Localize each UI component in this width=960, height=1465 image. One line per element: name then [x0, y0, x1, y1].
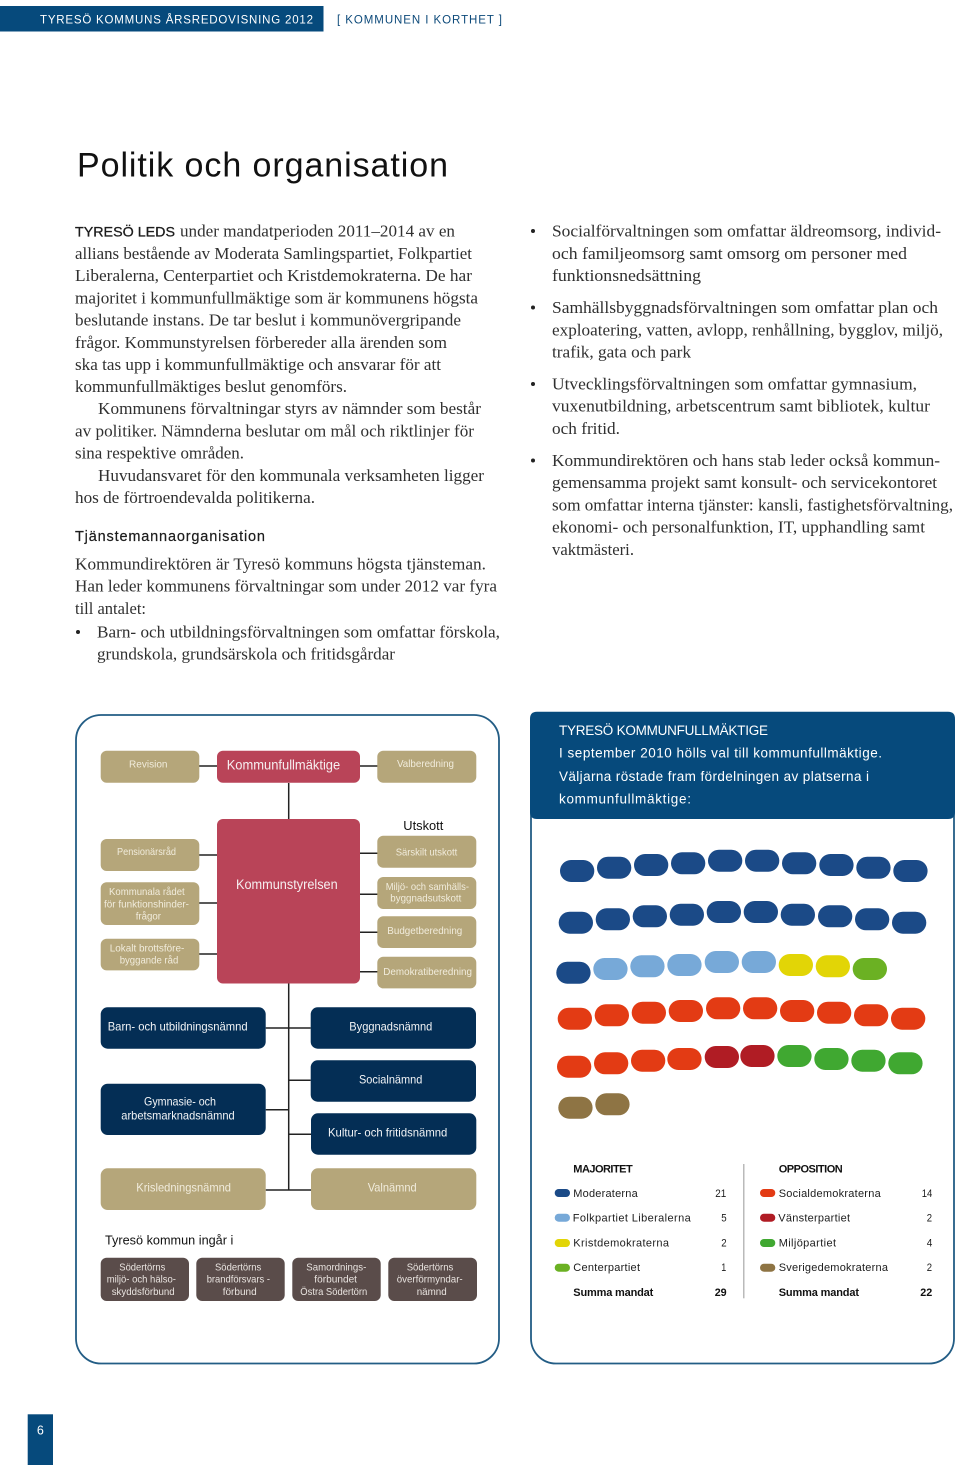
text block: organisation left column	[75, 554, 500, 664]
box: Demokratiberedning: Demokratiberedning	[383, 966, 472, 978]
box: Samordningsförbundet Östra Södertörn: förbundet	[314, 1274, 357, 1286]
title: Politik och organisation	[77, 146, 448, 184]
box: Södertörns brandförsvarsförbund: brandförsvars -	[207, 1274, 270, 1286]
box: Södertörns överförmyndarnämnd: nämnd	[417, 1286, 447, 1298]
legend: majoritet	[555, 1163, 727, 1299]
text block: right column bullet list: trafik, gata och park	[552, 342, 692, 362]
text block: intro left column: TYRESÖ LEDS	[75, 222, 175, 240]
legend: majoritet: 1	[721, 1262, 726, 1274]
box: Södertörns överförmyndarnämnd: överförmyndar-	[397, 1274, 463, 1286]
box: Kultur- och fritidsnämnd: Kultur- och fritidsnämnd	[328, 1126, 447, 1140]
text block: intro left column: majoritet i kommunfullmäktige som är kommunens högsta	[75, 288, 479, 308]
legend: majoritet: Moderaterna	[573, 1188, 639, 1200]
text block: intro left column: ska tas upp i kommunfullmäktige och ansvarar för att	[75, 355, 441, 374]
box: Samordningsförbundet Östra Södertörn: Samordnings-	[306, 1262, 367, 1274]
legend: majoritet: 29	[715, 1287, 727, 1299]
legend: opposition: Socialdemokraterna	[779, 1188, 882, 1200]
callout: Tyresö kommunfullmäktige header: I september 2010 hölls val till kommunfullmäktige.	[559, 746, 882, 760]
panel: election results	[530, 712, 955, 1364]
box: Gymnasie- och arbetsmarknadsnämnd: Gymnasie- och	[144, 1094, 216, 1108]
box: Södertörns brandförsvarsförbund	[196, 1258, 285, 1301]
seat row 3	[556, 951, 887, 984]
header band	[0, 6, 324, 32]
text block: intro left column: Kommunens förvaltningar styrs av nämnder som består	[98, 399, 482, 418]
legend: majoritet: Folkpartiet Liberalerna	[573, 1213, 692, 1225]
box: Byggnadsnämnd: Byggnadsnämnd	[349, 1020, 432, 1034]
heading: Tyresö kommun ingår i: Tyresö kommun ingår i	[105, 1232, 233, 1247]
box: Södertörns miljö- och hälsoskyddsförbund: skyddsförbund	[112, 1286, 175, 1298]
legend: opposition: 4	[927, 1238, 932, 1250]
box: Gymnasie- och arbetsmarknadsnämnd	[101, 1084, 266, 1135]
box: Kommunfullmäktige: Kommunfullmäktige	[227, 756, 340, 772]
text block: right column bullet list: Kommundirektören och hans stab leder också kommun-	[552, 451, 940, 470]
text block: intro left column: Huvudansvaret för den kommunala verksamheten ligger	[98, 466, 485, 485]
box: Södertörns överförmyndarnämnd: Södertörns	[407, 1262, 453, 1274]
box: Södertörns miljö- och hälsoskyddsförbund	[101, 1258, 189, 1301]
box: Pensionärsråd: Pensionärsråd	[117, 846, 176, 858]
box: Revision: Revision	[129, 758, 168, 770]
text block: intro left column: beslutande instans. De tar beslut i kommunövergripande	[75, 310, 461, 330]
text block: right column bullet list: ekonomi- och personalfunktion, IT, upphandling samt	[552, 518, 925, 536]
section label: [ KOMMUNEN I KORTHET ]	[337, 14, 502, 26]
text block: intro left column: allians bestående av Moderata Samlingspartiet, Folkpartiet	[75, 244, 472, 263]
text block: right column bullet list: gemensamma projekt samt konsult- och servicekontoret	[552, 473, 937, 492]
box: Socialnämnd: Socialnämnd	[359, 1072, 422, 1086]
header band: TYRESÖ KOMMUNS ÅRSREDOVISNING 2012	[40, 14, 313, 26]
text block: right column bullet list: exploatering, vatten, avlopp, renhållning, bygglov, miljö,	[552, 320, 943, 340]
legend: opposition: Summa mandat	[779, 1287, 859, 1299]
box: Södertörns överförmyndarnämnd	[388, 1258, 477, 1301]
box: Kommunala rådet	[101, 882, 199, 925]
box: Kommunstyrelsen: Kommunstyrelsen	[236, 877, 338, 892]
box: Samordningsförbundet Östra Södertörn	[292, 1258, 381, 1301]
callout: Tyresö kommunfullmäktige header: kommunfullmäktige:	[559, 792, 691, 807]
callout: Tyresö kommunfullmäktige header: Väljarna röstade fram fördelningen av platserna i	[559, 769, 869, 784]
legend: opposition: Sverigedemokraterna	[779, 1262, 889, 1274]
page number tab: 6	[37, 1424, 44, 1438]
box: Lokalt brottsförebyggande råd: byggande råd	[120, 954, 178, 966]
text block: organisation left column: Barn- och utbildningsförvaltningen som omfattar förskola,	[97, 622, 500, 642]
box: Kommunala rådet: Kommunala rådet	[109, 886, 185, 898]
text block: organisation left column: Han leder kommunens förvaltningar som under 2012 var fyra	[75, 576, 498, 596]
text block: organisation left column: grundskola, grundsärskola och fritidsgårdar	[97, 644, 396, 664]
box: Särskilt utskott: Särskilt utskott	[396, 846, 457, 858]
callout: Tyresö kommunfullmäktige header: TYRESÖ KOMMUNFULLMÄKTIGE	[559, 723, 768, 738]
text block: right column bullet list: vaktmästeri.	[552, 540, 634, 559]
legend: opposition: 14	[922, 1188, 932, 1200]
text block: right column bullet list: vuxenutbildning, arbetscentrum samt bibliotek, kultur	[552, 396, 931, 416]
box: Barn- och utbildningsnämnd: Barn- och utbildningsnämnd	[108, 1020, 248, 1034]
box: Miljö- och samhällsbyggnadsutskott: byggnadsutskott	[390, 893, 461, 905]
legend: majoritet: MAJORITET	[573, 1163, 633, 1175]
seat row 4	[558, 997, 925, 1030]
legend: opposition: 22	[920, 1287, 932, 1299]
text block: organisation left column: Kommundirektören är Tyresö kommuns högsta tjänsteman.	[75, 554, 486, 574]
legend: opposition: OPPOSITION	[779, 1163, 843, 1175]
text block: right column bullet list: och familjeomsorg samt omsorg om personer med	[552, 244, 908, 263]
callout: Tyresö kommunfullmäktige header	[530, 712, 955, 819]
legend: majoritet: Centerpartiet	[573, 1262, 640, 1274]
text block: right column bullet list: som omfattar interna tjänster: kansli, fastighetsförvaltning,	[552, 496, 953, 514]
box: Södertörns brandförsvarsförbund: förbund	[223, 1286, 257, 1298]
text block: right column bullet list: och fritid.	[552, 419, 620, 438]
box: Södertörns miljö- och hälsoskyddsförbund: miljö- och hälso-	[107, 1274, 176, 1286]
box: Revision	[101, 751, 199, 783]
box: Krisledningsnämnd	[101, 1168, 266, 1210]
box: Södertörns miljö- och hälsoskyddsförbund: Södertörns	[119, 1262, 165, 1274]
box: Kommunstyrelsen	[217, 819, 360, 984]
box: Miljö- och samhällsbyggnadsutskott: Miljö- och samhälls-	[386, 881, 469, 893]
text block: intro left column: sina respektive områden.	[75, 444, 244, 462]
seat row 6	[558, 1093, 630, 1119]
box: Miljö- och samhällsbyggnadsutskott	[377, 877, 476, 909]
legend: majoritet: 2	[721, 1238, 727, 1250]
page number tab	[28, 1414, 53, 1465]
text block: intro left column: frågor. Kommunstyrelsen förbereder alla ärenden som	[75, 333, 447, 352]
text block: right column bullet list: Utvecklingsförvaltningen som omfattar gymnasium,	[552, 374, 917, 394]
legend: opposition: 2	[927, 1262, 932, 1274]
text block: right column bullet list	[531, 222, 953, 559]
box: Socialnämnd	[311, 1060, 476, 1102]
box: Särskilt utskott	[377, 836, 476, 868]
box: Kultur- och fritidsnämnd	[311, 1113, 476, 1155]
text block: right column bullet list: funktionsnedsättning	[552, 266, 701, 285]
box: Barn- och utbildningsnämnd	[101, 1007, 266, 1049]
box: Kommunala rådet: för funktionshinder-	[104, 898, 189, 910]
legend: majoritet: Summa mandat	[573, 1287, 654, 1299]
box: Valnämnd	[311, 1168, 476, 1210]
heading: Tjänstemannaorganisation: Tjänstemannaorganisation	[75, 529, 265, 545]
text block: intro left column	[75, 222, 485, 507]
box: Pensionärsråd	[101, 839, 199, 871]
box: Valberedning: Valberedning	[397, 758, 454, 770]
box: Södertörns brandförsvarsförbund: Södertörns	[215, 1262, 261, 1274]
box: Budgetberedning	[377, 916, 476, 948]
box: Valberedning	[377, 751, 476, 783]
seat row 1	[560, 850, 928, 882]
panel: organisation chart	[76, 715, 499, 1364]
legend divider	[743, 1164, 744, 1298]
text block: intro left column: under mandatperioden 2011–2014 av en	[180, 222, 455, 240]
legend: opposition: 2	[927, 1213, 932, 1225]
seat row 5	[557, 1045, 923, 1078]
text block: intro left column: Liberalerna, Centerpartiet och Kristdemokraterna. De har	[75, 266, 473, 285]
box: Lokalt brottsförebyggande råd	[101, 939, 199, 970]
box: Budgetberedning: Budgetberedning	[387, 925, 462, 937]
connector lines	[199, 766, 378, 1190]
box: Samordningsförbundet Östra Södertörn: Östra Södertörn	[300, 1286, 367, 1298]
seat row 2	[559, 901, 926, 934]
box: Gymnasie- och arbetsmarknadsnämnd: arbetsmarknadsnämnd	[121, 1108, 235, 1122]
text block: intro left column: kommunfullmäktiges beslut genomförs.	[75, 377, 347, 396]
box: Krisledningsnämnd: Krisledningsnämnd	[136, 1181, 231, 1195]
box: Kommunala rådet: frågor	[136, 910, 161, 922]
box: Demokratiberedning	[377, 957, 476, 988]
legend: opposition: Vänsterpartiet	[778, 1213, 850, 1225]
box: Byggnadsnämnd	[311, 1007, 476, 1049]
legend: opposition	[760, 1163, 932, 1299]
text block: right column bullet list: Samhällsbyggnadsförvaltningen som omfattar plan och	[552, 298, 939, 317]
legend: majoritet: 5	[721, 1213, 727, 1225]
heading: Utskott: Utskott	[403, 818, 444, 833]
box: Kommunfullmäktige	[217, 751, 360, 783]
box: Lokalt brottsförebyggande råd: Lokalt brottsföre-	[110, 942, 185, 954]
box: Valnämnd: Valnämnd	[368, 1181, 417, 1195]
text block: right column bullet list: Socialförvaltningen som omfattar äldreomsorg, individ-	[552, 222, 941, 240]
chart: seat distribution	[556, 850, 928, 1119]
legend: majoritet: 21	[715, 1188, 726, 1200]
text block: organisation left column: till antalet:	[75, 599, 146, 618]
legend: opposition: Miljöpartiet	[779, 1238, 836, 1250]
text block: intro left column: av politiker. Nämnderna beslutar om mål och riktlinjer för	[75, 422, 475, 440]
legend: majoritet: Kristdemokraterna	[573, 1238, 670, 1250]
text block: intro left column: hos de förtroendevalda politikerna.	[75, 488, 315, 507]
